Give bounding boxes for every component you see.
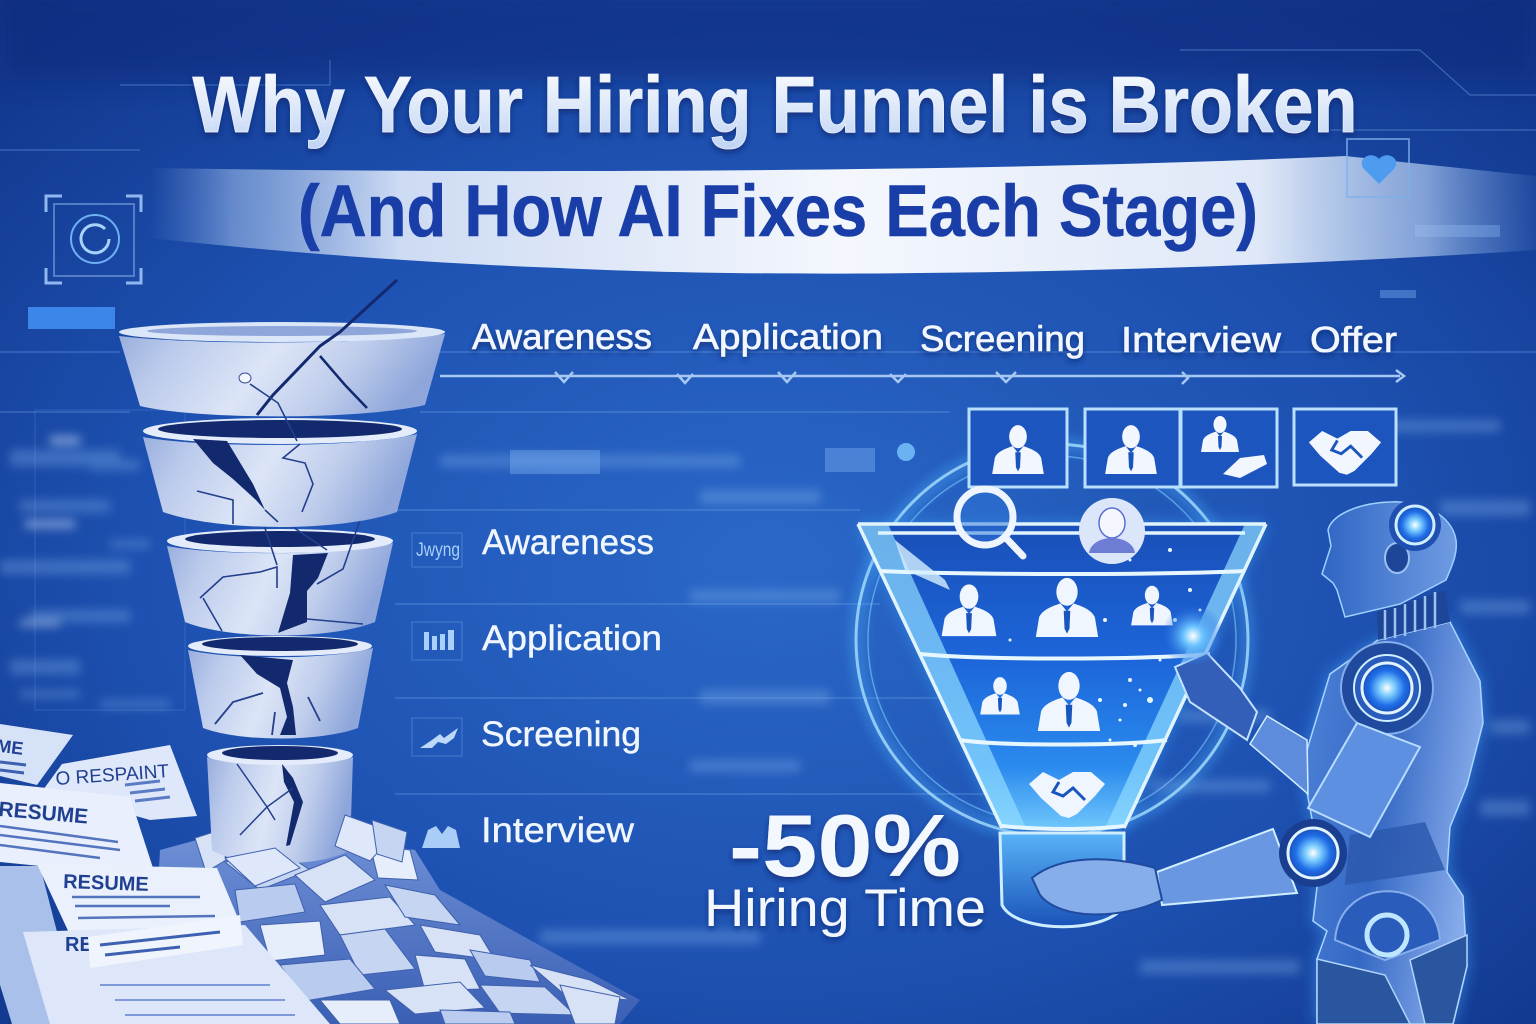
paper 2: O RESPAINT: [55, 761, 170, 790]
pile of crumpled papers: [150, 830, 640, 1024]
robot lower hand: [1032, 859, 1162, 914]
title: Why Your Hiring Funnel is Broken: [192, 60, 1358, 149]
list: Interview: [422, 811, 635, 850]
robot upper arm: [1308, 723, 1420, 837]
list: Awareness: Awareness: [482, 523, 654, 562]
robot ear: [1385, 543, 1409, 573]
resume papers: [0, 724, 330, 1024]
robot temple light: [1389, 499, 1441, 551]
card 2: [1085, 409, 1180, 487]
card 4: handshake: [1294, 409, 1396, 485]
robot glow: [1307, 622, 1483, 1024]
paper 3: [0, 783, 153, 868]
handshake: [1029, 772, 1105, 818]
AI funnel: [858, 489, 1266, 927]
list: Screening: [412, 715, 641, 756]
robot forearm: [1157, 829, 1297, 905]
robot lower body: [1317, 935, 1467, 1024]
paper stack edge: [0, 866, 72, 1024]
timeline arrow: [440, 370, 1404, 384]
magnifier icon: [957, 489, 1023, 556]
robot shoulder: [1341, 642, 1433, 734]
funnel walls: [858, 524, 1266, 828]
funnel spout: [1000, 833, 1124, 927]
stage list: [412, 523, 662, 850]
list: Application: [412, 619, 662, 660]
list: Awareness: Jwyng: [416, 540, 460, 561]
robot hip light: [1335, 891, 1440, 960]
robot midriff: [1345, 822, 1445, 885]
stage: Offer: Offer: [1310, 319, 1397, 360]
foreground crumpled papers: [225, 815, 407, 886]
robot elbow: [1279, 819, 1347, 887]
funnel segment 2: [143, 418, 417, 527]
paper 5: [23, 915, 330, 1024]
robot head: [1322, 502, 1456, 617]
paper 4: [37, 864, 245, 935]
card 3: [1181, 409, 1277, 487]
robot torso: [1307, 622, 1483, 1024]
funnel segment 1: [119, 280, 445, 441]
stage labels row: [472, 316, 1397, 360]
banner: [150, 156, 1536, 274]
paper 3: RESUME: [0, 798, 89, 829]
icon: target: [46, 196, 141, 283]
funnel segment 3: [167, 515, 393, 636]
funnel segment 4: [188, 636, 373, 738]
AI glow ring: [856, 443, 1248, 836]
list: Screening: Screening: [481, 715, 641, 754]
paper 4: RESUME: [63, 871, 149, 896]
stat: -50% hiring time: -50%: [729, 796, 961, 895]
candidate cards: [969, 409, 1396, 487]
paper 5: RE: [65, 934, 93, 956]
funnel people row 2: [980, 672, 1100, 731]
stage: Interview: Interview: [1121, 319, 1282, 360]
robot raised forearm: [1250, 716, 1308, 794]
stage: Awareness: Awareness: [472, 316, 652, 357]
funnel segment 5: [207, 745, 353, 864]
spark at fingertip: [1161, 604, 1225, 668]
icon: heart: [1347, 139, 1409, 197]
paper 1: [0, 724, 73, 785]
robot neck: [1377, 590, 1450, 640]
broken funnel: [119, 280, 445, 864]
stat: -50% hiring time: Hiring Time: [704, 879, 986, 938]
list: Application: Application: [482, 619, 662, 658]
funnel people row 1: [942, 578, 1173, 637]
robot raised hand: [1175, 653, 1257, 740]
robot: [1032, 499, 1483, 1024]
stat: -50% hiring time: [704, 796, 986, 938]
stage: Application: Application: [693, 316, 883, 357]
stage: Screening: Screening: [920, 318, 1085, 359]
paper 2: [43, 745, 197, 820]
candidate avatar: [1079, 498, 1145, 564]
sparkles: [1008, 548, 1202, 747]
subtitle: (And How AI Fixes Each Stage): [298, 171, 1258, 252]
list: Interview: Interview: [481, 811, 635, 850]
card 1: [969, 409, 1067, 487]
list: Awareness: [412, 523, 654, 567]
